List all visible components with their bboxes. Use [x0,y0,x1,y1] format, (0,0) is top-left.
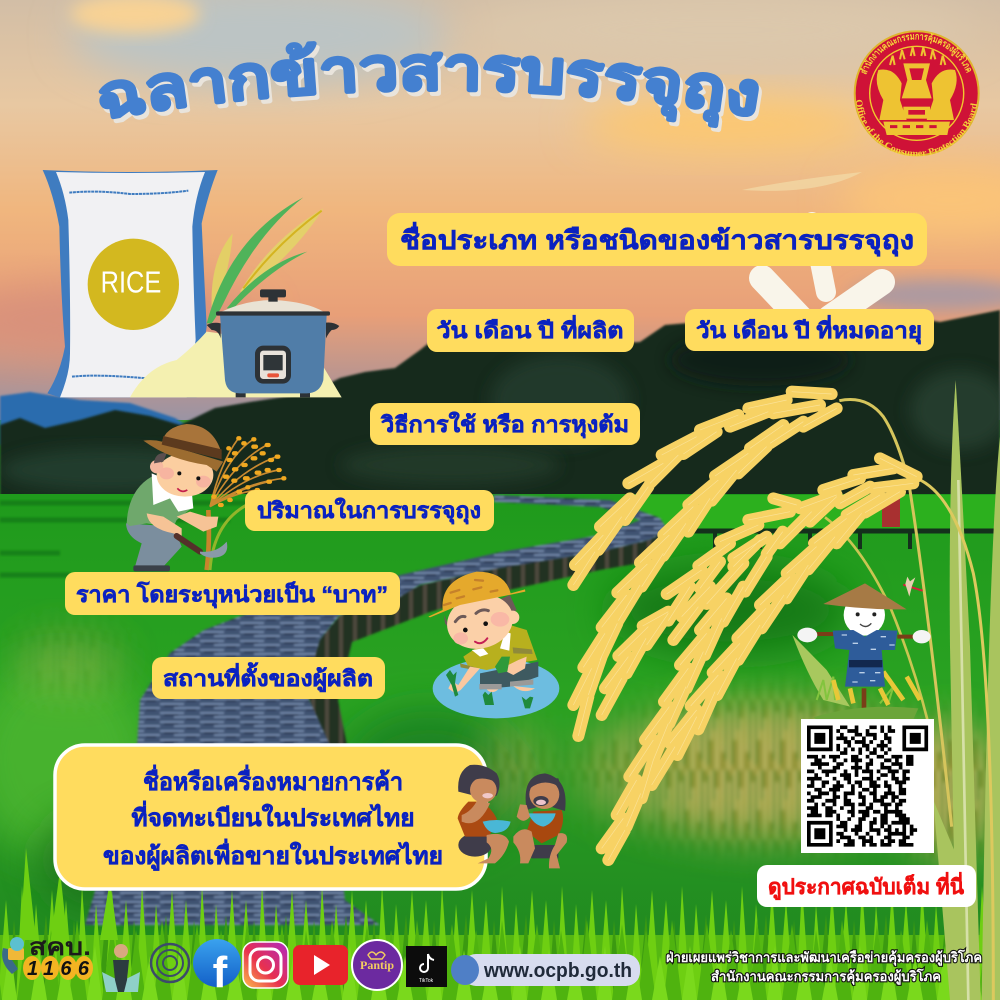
footer icon: TikTok: TikTok [419,978,434,984]
footer icon: YouTube [293,945,348,985]
footer credit text: ฝ่ายเผยแพร่วิชาการและพัฒนาเครือข่ายคุ้มครองผู้บริโภค [666,948,982,966]
footer credit text [666,948,982,985]
label: production date [427,309,634,352]
footer icon: Facebook: f [213,948,228,997]
rice panicles [573,392,917,860]
background: treeline [0,310,1000,500]
icon: rice bag [43,170,218,397]
footer icon: Facebook [193,939,241,997]
rice stalk stems and tall leaves [825,380,1000,1000]
footer website pill [451,954,640,986]
label: usage or cooking [370,403,640,445]
logo: Office of the Consumer Protection Board seal: Office of the Consumer Protection Board [856,100,977,156]
white rice grains behind labels [762,222,882,318]
footer icon: TikTok [406,946,447,987]
label: brand name box: ชื่อหรือเครื่องหมายการค้า [143,764,403,796]
logo: Office of the Consumer Protection Board seal: สำนักงานคณะกรรมการคุ้มครองผู้บริโภค [860,33,972,74]
footer website pill: www.ocpb.go.th [483,960,632,982]
label: production date: วัน เดือน ปี ที่ผลิต [436,314,624,343]
footer icon: Instagram [243,942,288,988]
label: price in baht: ราคา โดยระบุหน่วยเป็น “บาท” [76,580,388,609]
footer icon: presenter figure [102,944,140,992]
logo: Office of the Consumer Protection Board seal [854,30,980,156]
label: expiry date: วัน เดือน ปี ที่หมดอายุ [696,314,922,345]
label: product type [387,213,927,266]
label: producer location [152,657,385,699]
label: price in baht [65,572,400,615]
link button: full announcement [757,865,976,907]
label: brand name box [55,745,486,889]
icon: rice pile and cooker [130,197,342,397]
footer logo: OCPB hotline 1166 [2,934,93,980]
icon: farmer planting rice [428,572,559,718]
label: package quantity [245,490,494,531]
footer icon: Pantip: Pantip [360,958,394,972]
label: producer location: สถานที่ตั้งของผู้ผลิต [163,662,373,693]
footer credit text: สำนักงานคณะกรรมการคุ้มครองผู้บริโภค [711,967,941,985]
icon: children eating [458,765,567,868]
background: sunset sky [0,0,1000,420]
icon: rice bag: RICE [101,266,161,300]
walkway [85,495,668,925]
label: brand name box: ที่จดทะเบียนในประเทศไทย [132,800,414,832]
bottom grass [0,848,1000,1000]
icon: farmer with sickle [126,424,284,571]
label: package quantity: ปริมาณในการบรรจุถุง [257,497,481,525]
footer icon: seal [151,944,189,982]
icon: scarecrow with dragonfly [792,577,931,719]
label: usage or cooking: วิธีการใช้ หรือ การหุงต้ม [380,411,629,439]
title: ฉลากข้าวสารบรรจุถุง [102,45,762,132]
background: rice field [0,494,996,935]
footer logo: OCPB hotline 1166: สคบ. [29,934,91,961]
link button: full announcement: ดูประกาศฉบับเต็ม ที่นี่ [768,871,965,901]
footer icon: Pantip [352,940,402,990]
label: expiry date [685,309,934,351]
QR code [801,719,934,853]
footer logo: OCPB hotline 1166: 1166 [27,958,90,980]
label: brand name box: ของผู้ผลิตเพื่อขายในประเทศไทย [103,838,443,871]
background: mountains [0,392,210,445]
label: product type: ชื่อประเภท หรือชนิดของข้าวสารบรรจุถุง [400,221,914,257]
title: ฉลากข้าวสารบรรจุถุง [98,41,759,128]
background: pale leaf shape in sky [742,172,862,191]
